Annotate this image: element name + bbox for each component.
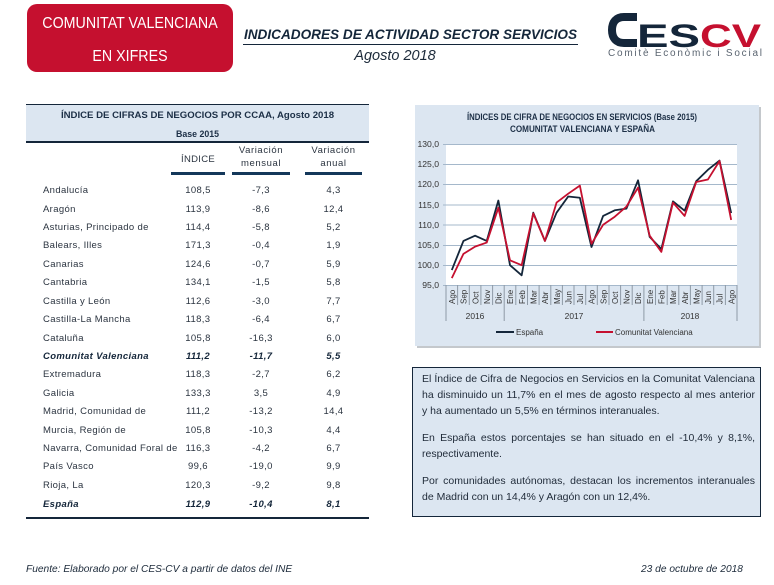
row: Castilla-La Mancha: -6,4 [252,314,270,325]
row: Cantabria: 5,8 [326,277,341,288]
x axis ticks [446,285,737,321]
row: Balears [43,240,341,251]
row: Madrid: Madrid, Comunidad de [43,406,146,417]
chart title [467,112,697,134]
logo: CES CV [608,13,762,59]
row: Rioja: 9,8 [326,480,341,490]
column header: variación anual: anual [320,158,347,169]
row: Cantabria [43,277,341,288]
y axis gridlines and labels: 110,0 [418,220,439,230]
x axis month labels: May [692,289,701,304]
row: Comunitat Valenciana: 5,5 [326,351,341,362]
chart title: COMUNITAT VALENCIANA Y ESPAÑA [510,124,655,134]
row: Castilla-La Mancha: 6,7 [326,314,341,325]
y axis gridlines and labels: 100,0 [417,260,439,270]
paragraph: Comunitat Valenciana: El Índice de Cifra de Negocios en Servicios en la Comunitat Valenciana [422,373,755,385]
row: Castilla-La Mancha [43,314,341,325]
x axis year labels [466,311,700,321]
row: Comunitat Valenciana [43,351,341,362]
x axis month labels: Oct [611,291,620,304]
row: Cataluña: Cataluña [43,332,84,344]
x axis month labels: Abr [541,291,550,304]
row: Andalucía: Andalucía [43,185,88,196]
x axis month labels: Abr [681,291,690,304]
panel: table of index by region [26,104,369,519]
column header: índice [171,148,225,175]
row: Cantabria: 134,1 [185,277,211,288]
line: Comunitat Valenciana [452,161,731,278]
row: España: 112,9 [186,499,210,510]
column header: variación mensual [232,144,290,175]
row: Galicia: 3,5 [254,388,268,398]
x axis month labels: Jul [576,294,585,304]
row: Castilla-La Mancha: 118,3 [186,314,210,325]
row: Castilla y León: Castilla y León [43,296,111,306]
x axis month labels: Ago [448,289,457,304]
x axis year labels: 2016 [466,311,485,321]
y axis gridlines and labels: 130,0 [417,139,439,149]
column header: variación anual [305,144,362,175]
x axis month labels: Oct [471,291,480,304]
row: Andalucía: -7,3 [252,185,270,196]
row: Balears: Balears, Illes [43,240,102,251]
row: Comunitat Valenciana: -11,7 [250,351,272,362]
row: Asturias: 114,4 [186,222,210,233]
y axis gridlines and labels [417,139,737,290]
x axis month labels: Dic [634,292,643,304]
row: Andalucía [43,185,341,196]
row: Madrid [43,406,343,417]
x axis month labels: Jun [564,291,573,304]
x axis month labels: Dic [495,292,504,304]
subtitle: Agosto 2018 [354,48,436,64]
row: Cataluña: -16,3 [249,332,273,344]
x axis month labels: Mar [530,290,538,304]
x axis month labels: May [553,289,562,304]
y axis gridlines and labels: 120,0 [417,179,439,189]
table heading band: Base 2015 [176,129,219,139]
paragraph: Comunitat Valenciana: ha disminuido un 11,7% en el mes de agosto respecto al mes anterior [422,389,755,401]
title: INDICADORES DE ACTIVIDAD SECTOR SERVICIOS [244,27,577,42]
row: Rioja: -9,2 [252,480,270,490]
x axis month labels: Feb [518,290,527,304]
chart legend [496,328,693,337]
row: Extremadura: 118,3 [186,369,210,380]
row: Navarra: -4,2 [252,443,270,454]
row: Aragón [43,204,343,214]
row: País Vasco [43,461,341,472]
column header: índice: ÍNDICE [181,154,215,165]
row: Asturias [43,222,341,233]
row: Castilla-La Mancha: Castilla-La Mancha [43,314,131,325]
row: Murcia: 105,8 [185,424,211,436]
chart legend: España [516,328,544,337]
row: Aragón: Aragón [43,204,76,214]
y axis gridlines and labels: 95,0 [422,280,439,290]
row: Murcia: 4,4 [326,424,341,436]
row: Canarias: Canarias [43,258,84,270]
chart legend: Comunitat Valenciana [615,328,693,337]
badge: Comunitat Valenciana en xifres [27,4,233,72]
panel: commentary text box [412,367,761,517]
chart title: ÍNDICES DE CIFRA DE NEGOCIOS EN SERVICIOS (Base 2015) [467,112,697,122]
row: País Vasco: 99,6 [188,461,208,472]
row: España: -10,4 [249,499,273,510]
x axis year labels: 2017 [565,311,584,321]
row: España: España [43,499,79,510]
row: Aragón: 113,9 [186,204,210,214]
table heading band: ÍNDICE DE CIFRAS DE NEGOCIOS POR CCAA, Agosto 2018 [61,110,334,121]
row: País Vasco: País Vasco [43,461,94,472]
paragraph: España [422,432,755,460]
row: Aragón: 12,4 [324,204,343,214]
row: Cataluña: 105,8 [185,332,211,344]
row: Balears: 171,3 [185,240,211,251]
paragraph: España: En España estos porcentajes se han situado en el -10,4% y 8,1%, [422,432,755,444]
row: Navarra [43,443,341,454]
row: España: 8,1 [326,499,341,510]
logo: CES CV: Comitè Econòmic i Social [608,48,762,59]
row: Navarra: 6,7 [326,443,341,454]
row: Canarias [43,258,341,270]
row: España [43,499,341,510]
x axis month labels: Mar [669,290,678,304]
x axis month labels: Jul [716,294,725,304]
chart background [415,105,761,348]
row: Asturias: 5,2 [326,222,341,233]
paragraph: comunidades autónomas: Por comunidades autónomas, destacan los incrementos interanuales [422,475,755,487]
row: Extremadura: -2,7 [252,369,270,380]
logo: CES CV: CV [700,18,762,54]
row: Canarias: -0,7 [252,258,270,270]
row: Rioja [43,480,341,490]
row: Galicia: 133,3 [185,388,211,398]
row: Madrid: -13,2 [249,406,273,417]
row: País Vasco: 9,9 [326,461,341,472]
row: Balears: 1,9 [326,240,341,251]
row: Castilla y León: 112,6 [186,296,210,306]
column header: variación mensual: Variación [239,145,283,156]
y axis gridlines and labels: 115,0 [418,200,439,210]
row: Murcia [43,424,341,436]
row: Andalucía: 4,3 [326,185,341,196]
row: Cataluña [43,332,341,344]
y axis gridlines and labels: 125,0 [417,159,439,169]
row: Asturias: Asturias, Principado de [43,222,149,233]
paragraph: comunidades autónomas: de Madrid con un 14,4% y Aragón con un 12,4%. [422,491,650,503]
line: España [452,161,731,275]
paragraph: España: respectivamente. [422,448,502,460]
row: Asturias: -5,8 [252,222,270,233]
logo: CES CV: ES [637,18,700,54]
x axis year labels: 2018 [681,311,700,321]
column header: variación mensual: mensual [241,158,281,169]
row: Cantabria: -1,5 [252,277,270,288]
row: Balears: -0,4 [252,240,270,251]
row: Cantabria: Cantabria [43,277,87,288]
row: Murcia: Murcia, Región de [43,424,126,436]
row: Cataluña: 6,0 [326,332,341,344]
table bottom rule [26,517,369,519]
row: Comunitat Valenciana: 111,2 [186,351,210,362]
x axis month labels [448,289,736,304]
row: Rioja: Rioja, La [43,480,84,490]
row: Comunitat Valenciana: Comunitat Valenciana [43,351,149,362]
row: Murcia: -10,3 [249,424,273,436]
x axis month labels: Ene [646,289,655,304]
row: Navarra: 116,3 [186,443,210,454]
x axis month labels: Feb [658,290,666,304]
row: Canarias: 124,6 [185,258,211,270]
paragraph: Comunitat Valenciana [422,373,755,417]
row: Navarra: Navarra, Comunidad Foral de [43,443,178,454]
x axis month labels: Nov [483,290,492,304]
row: Castilla y León: -3,0 [252,296,270,306]
row: Extremadura: Extremadura [43,369,101,380]
paragraph: Comunitat Valenciana: y ha aumentado un 5,5% en términos interanuales. [422,405,660,417]
row: Rioja: 120,3 [185,480,211,490]
table heading band [26,104,369,143]
row: Aragón: -8,6 [252,204,270,214]
x axis month labels: Sep [460,289,469,304]
row: Madrid: 111,2 [186,406,210,417]
footer: date: 23 de octubre de 2018 [641,564,743,575]
row: Castilla y León: 7,7 [326,296,341,306]
badge: Comunitat Valenciana en xifres: COMUNITAT VALENCIANA [42,15,218,32]
row: País Vasco: -19,0 [249,461,273,472]
x axis month labels: Nov [623,290,632,304]
row: Extremadura [43,369,341,380]
footer: source: Fuente: Elaborado por el CES-CV a partir de datos del INE [26,564,292,575]
x axis month labels: Ene [506,289,515,304]
row: Andalucía: 108,5 [185,185,211,196]
row: Galicia: Galicia [43,388,74,398]
row: Canarias: 5,9 [326,258,341,270]
row: Galicia: 4,9 [326,388,341,398]
row: Galicia [43,388,341,398]
badge: Comunitat Valenciana en xifres: EN XIFRES [92,48,168,65]
row: Extremadura: 6,2 [326,369,341,380]
paragraph: comunidades autónomas [422,475,755,503]
x axis month labels: Ago [588,289,597,304]
column header: variación anual: Variación [311,145,356,156]
row: Castilla y León [43,296,341,306]
row: Madrid: 14,4 [324,406,343,417]
x axis month labels: Ago [727,289,736,304]
x axis month labels: Jun [704,291,713,304]
y axis gridlines and labels: 105,0 [417,240,439,250]
x axis month labels: Sep [599,289,608,304]
